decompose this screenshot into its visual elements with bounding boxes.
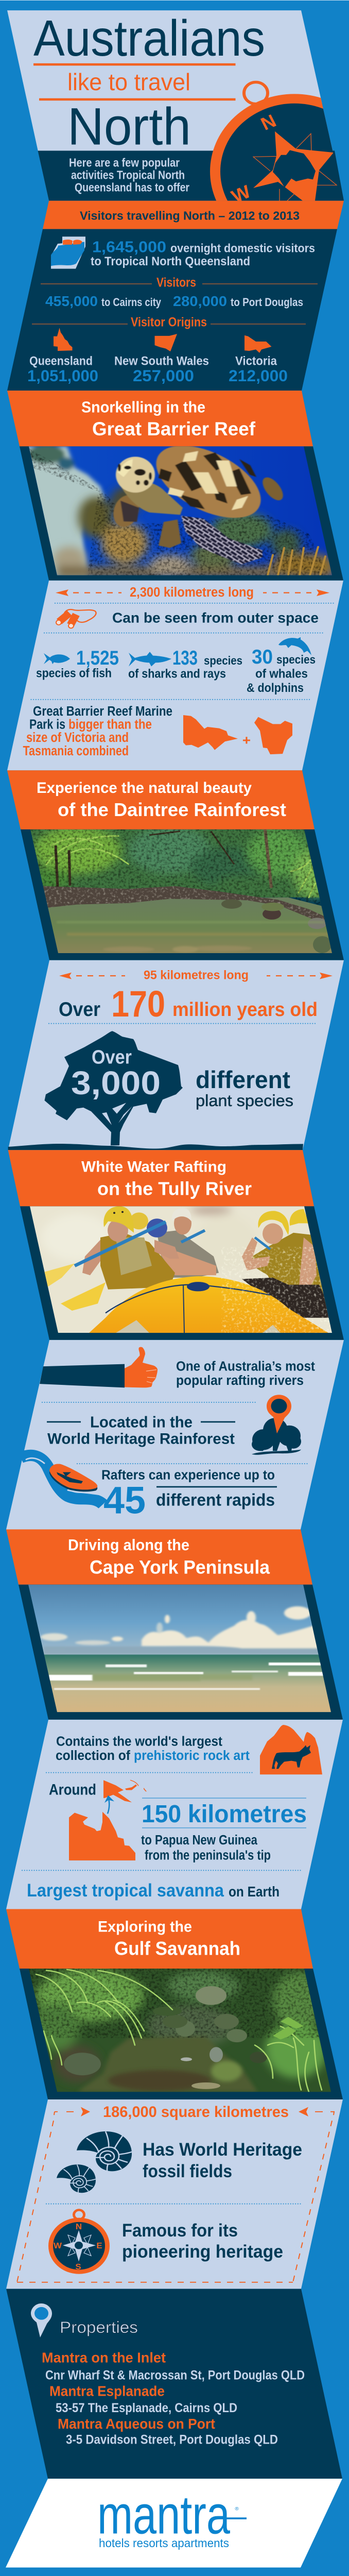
panel: Cape York facts: [6, 1720, 343, 1909]
fact: 45 different rapids: Rafters can experience up to: [101, 1467, 275, 1482]
heading: Great Barrier Reef: [7, 391, 313, 446]
icon: raft on wave: [21, 1455, 103, 1504]
panel: reef facts: [7, 581, 343, 770]
intro text: Here are a few popular: [69, 157, 180, 170]
arrow: peninsula to PNG: [104, 1795, 114, 1814]
title: like to travel: like to travel: [67, 69, 190, 96]
fact: 95 kilometres long: [59, 968, 333, 982]
heading: Gulf Savannah: Exploring the: [98, 1918, 192, 1935]
stat: origin states: 1,051,000: [27, 366, 98, 385]
panel: Gulf Savannah facts: [6, 2099, 343, 2289]
stat: marine species: 30: [252, 646, 273, 668]
panel: Daintree facts: [8, 960, 344, 1150]
stat: destination numbers: 455,000: [45, 294, 98, 310]
fact: rock art: collection of: [56, 1748, 130, 1763]
icon: ammonite large: [77, 2131, 132, 2171]
panel: rafting facts: [6, 1340, 344, 1529]
stat: marine species: of whales: [255, 667, 308, 681]
fact: largest tropical savanna: Largest tropical savanna: [27, 1880, 224, 1900]
stat: origin states: New South Wales: [114, 354, 209, 368]
heading: Gulf Savannah: Gulf Savannah: [114, 1938, 240, 1959]
stat: overnight visitors: to Tropical North Queensland: [91, 255, 250, 268]
fact: world heritage rainforest: [47, 1413, 235, 1447]
heading: Tully River: on the Tully River: [97, 1178, 252, 1199]
icon: large compass: N: [257, 110, 280, 134]
photo: white water rafting: [20, 1205, 344, 1340]
stat: destination numbers: to Cairns city: [101, 296, 161, 309]
fact: different plant species: [196, 1066, 293, 1110]
icon: Victoria map large: [183, 715, 238, 750]
stat: marine species: of sharks and rays: [128, 667, 226, 681]
icon: large compass: [210, 80, 344, 201]
logo: mantra: hotels resorts apartments: [99, 2537, 229, 2550]
icon: bed: [51, 236, 85, 269]
fact: 2,300 kilometres long: 2,300 kilometres long: [130, 585, 254, 600]
fact: different plant species: plant species: [196, 1091, 293, 1110]
property: Mantra Esplanade: 53-57 The Esplanade, Cairns QLD: [56, 2401, 237, 2415]
icon: Papua New Guinea map: [103, 1780, 147, 1802]
title: North: North: [67, 97, 191, 156]
icon: New South Wales map: [154, 334, 177, 351]
icon: small compass: [50, 2210, 107, 2272]
stat: overnight visitors: [91, 238, 315, 268]
stat: destination numbers: to Port Douglas: [231, 296, 303, 309]
fact: rock art: [56, 1734, 250, 1763]
fact: 45 different rapids: [101, 1467, 277, 1522]
icon: Queensland map: [54, 328, 72, 351]
heading: Daintree Rainforest: Experience the natural beauty: [37, 779, 252, 796]
property: Mantra on the Inlet: Mantra on the Inlet: [42, 2350, 166, 2366]
stat: marine species: species: [204, 654, 242, 668]
icon: tree with plant species count: Over: [92, 1046, 132, 1068]
fact: over 170 million years old: [59, 983, 318, 1024]
heading: Cape York Peninsula: Cape York Peninsula: [90, 1557, 270, 1578]
heading: Cape York Peninsula: Driving along the: [68, 1536, 189, 1553]
icon: thumbs up: [40, 1347, 158, 1387]
stat: destination numbers: [45, 294, 303, 310]
fact: marine park size: Park is: [29, 717, 65, 732]
icon: properties pin: [31, 2303, 52, 2337]
stat: marine species: species: [276, 653, 316, 667]
fact: pioneering heritage: pioneering heritage: [122, 2242, 283, 2262]
fact: pioneering heritage: [122, 2220, 283, 2262]
fact: popular rafting rivers: One of Australia’s most: [176, 1359, 315, 1374]
fact: marine park size: Great Barrier Reef Marine: [33, 704, 172, 719]
fact: 150 kilometres: [141, 1798, 307, 1862]
photo: Gulf Savannah rainforest creek: [20, 1967, 343, 2099]
stat: origin states: Queensland: [29, 354, 93, 368]
icon: small compass: E: [96, 2241, 102, 2250]
property: Mantra Aqueous on Port: Mantra Aqueous on Port: [58, 2416, 215, 2432]
heading: visitors: Visitors: [156, 276, 196, 290]
fact: popular rafting rivers: [176, 1359, 315, 1388]
stat: origin states: 257,000: [133, 366, 194, 385]
raft: [85, 1276, 335, 1336]
heading: Daintree Rainforest: [7, 770, 315, 829]
icon: small compass: S: [75, 2263, 81, 2272]
property: Mantra Esplanade: Mantra Esplanade: [49, 2384, 165, 2399]
fact: 186,000 square kilometres: 186,000 square kilometres: [103, 2103, 289, 2121]
rafters: [44, 1206, 335, 1318]
icon: small compass: N: [76, 2223, 82, 2231]
icon: Victoria map: [245, 335, 272, 353]
fact: marine park size: size of Victoria and: [26, 730, 129, 745]
fact: largest tropical savanna: on Earth: [229, 1884, 280, 1900]
property: Mantra Esplanade: [49, 2384, 237, 2415]
panel: properties: [6, 2289, 342, 2479]
property: Mantra Aqueous on Port: [58, 2416, 278, 2447]
heading: Tully River: [8, 1150, 314, 1206]
icon: shark: [129, 652, 171, 667]
stat: origin states: Victoria: [235, 354, 277, 368]
fact: fossil fields: Has World Heritage: [143, 2140, 302, 2160]
intro text: [69, 157, 189, 194]
logo: mantra: ®: [235, 2506, 239, 2512]
fact: 2,300 kilometres long: [56, 585, 329, 600]
stat: overnight visitors: overnight domestic visitors: [170, 242, 315, 255]
icon: binoculars: [56, 609, 96, 628]
fact: seen from space: Can be seen from outer space: [112, 610, 319, 626]
icon: Tasmania map: [254, 717, 292, 754]
panel: Mantra logo: [6, 2479, 342, 2567]
intro text: Queensland has to offer: [75, 181, 189, 194]
panel: visitor statistics: [7, 229, 337, 391]
photo: beach and ocean: [19, 1582, 343, 1720]
fact: rock art: prehistoric rock art: [134, 1748, 250, 1763]
property: Mantra on the Inlet: [42, 2350, 305, 2382]
fact: 45 different rapids: different rapids: [156, 1491, 275, 1510]
icon: trees: [252, 1418, 301, 1455]
fact: marine park size: Tasmania combined: [23, 743, 129, 758]
fact: fossil fields: [143, 2140, 302, 2181]
stat: origin states: 212,000: [229, 366, 288, 385]
heading: Gulf Savannah: [6, 1909, 313, 1969]
stat: marine species: 133: [172, 647, 198, 669]
fact: over 170 million years old: 170: [111, 983, 165, 1024]
stat: origin states: [27, 354, 288, 385]
heading: Cape York Peninsula: [6, 1529, 312, 1585]
fact: world heritage rainforest: Located in the: [90, 1413, 193, 1431]
icon: large compass: W: [228, 181, 254, 207]
heading: Great Barrier Reef: Snorkelling in the: [81, 398, 205, 416]
icon: small compass: W: [54, 2241, 62, 2250]
title: Australians: Australians: [33, 10, 265, 66]
fact: 95 kilometres long: 95 kilometres long: [144, 968, 249, 982]
stat: destination numbers: 280,000: [173, 294, 227, 310]
fact: over 170 million years old: million years old: [172, 998, 318, 1021]
panel: visitors header band: Visitors travelling North – 2012 to 2013: [80, 209, 300, 223]
fact: 150 kilometres: from the peninsula's tip: [145, 1848, 271, 1862]
fact: world heritage rainforest: World Heritage Rainforest: [47, 1430, 235, 1447]
intro text: activities Tropical North: [71, 168, 185, 182]
stat: overnight visitors: 1,645,000: [92, 238, 166, 256]
fact: 150 kilometres: 150 kilometres: [142, 1800, 307, 1827]
fact: rock art: Contains the world's largest: [56, 1734, 222, 1749]
icon: Cape York map: [69, 1812, 135, 1860]
icon: ammonite small: [57, 2164, 96, 2193]
fact: marine park size: bigger than the: [68, 717, 152, 732]
photo: sea turtle on reef: [20, 446, 343, 581]
heading: Daintree Rainforest: of the Daintree Rainforest: [58, 800, 286, 820]
heading: properties: Properties: [60, 2318, 138, 2336]
heading: visitor origins: Visitor Origins: [131, 315, 207, 329]
fact: fossil fields: fossil fields: [143, 2161, 232, 2181]
stat: marine species: species of fish: [36, 667, 112, 680]
icon: tree with plant species count: [8, 1031, 303, 1150]
property: Mantra Aqueous on Port: 3-5 Davidson Street, Port Douglas QLD: [66, 2433, 278, 2447]
icon: rock with bull art: [260, 1725, 322, 1774]
fact: marine park size: [23, 704, 172, 758]
fact: popular rafting rivers: popular rafting rivers: [176, 1373, 304, 1388]
icon: dolphin: [278, 637, 311, 655]
sea turtle: [113, 446, 284, 565]
dashed border with arrows: [17, 2107, 334, 2282]
fact: 150 kilometres: to Papua New Guinea: [141, 1833, 258, 1848]
fact: different plant species: different: [196, 1066, 290, 1094]
icon: tree with plant species count: 3,000: [71, 1065, 161, 1101]
label: around: Around: [49, 1781, 96, 1798]
stat: marine species: & dolphins: [247, 681, 304, 695]
panel: visitors header band: [43, 201, 344, 229]
stat: marine species: [36, 646, 316, 695]
stat: marine species: 1,525: [76, 647, 119, 669]
heading: Great Barrier Reef: Great Barrier Reef: [92, 419, 255, 440]
icon: map pin: [267, 1395, 291, 1433]
photo: Daintree river: [21, 826, 344, 960]
plus sign: +: [242, 733, 251, 748]
fact: over 170 million years old: Over: [59, 998, 100, 1021]
panel: title: [7, 10, 344, 201]
icon: fish: [44, 653, 70, 664]
logo: mantra: mantra: [97, 2485, 230, 2545]
fact: 45 different rapids: 45: [103, 1479, 146, 1522]
heading: Tully River: White Water Rafting: [81, 1158, 226, 1175]
fact: pioneering heritage: Famous for its: [122, 2220, 238, 2240]
